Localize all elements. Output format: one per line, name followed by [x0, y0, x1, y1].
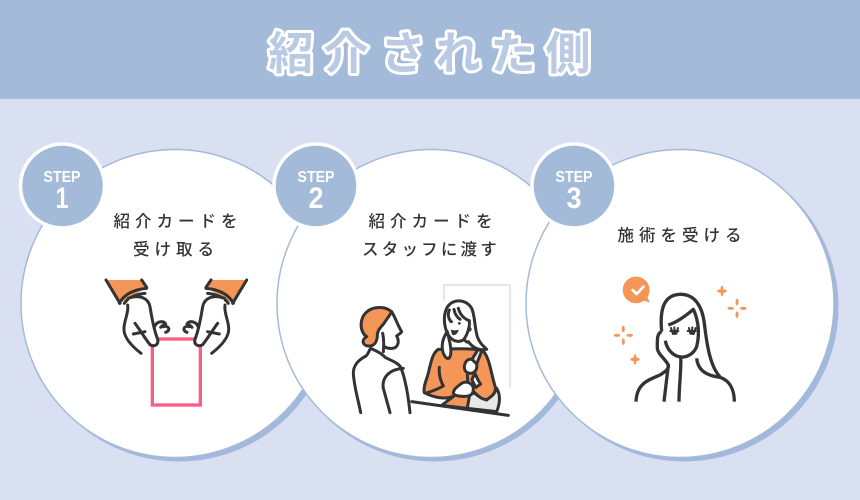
customer — [424, 301, 499, 412]
door frame — [444, 285, 510, 387]
step 1 text: 紹介カードを — [114, 212, 242, 231]
badge: step 2: STEP — [298, 169, 335, 186]
title: さ — [380, 28, 426, 79]
badge: step 3: 3 — [566, 182, 582, 215]
title: 紹 — [268, 28, 314, 79]
step 2 text — [362, 212, 500, 259]
header band — [0, 0, 860, 99]
badge: step 2: 2 — [308, 182, 324, 215]
speech bubble check — [623, 277, 650, 303]
step 1 text — [114, 212, 242, 259]
sparkles — [614, 286, 747, 364]
icon: handing the card to staff — [353, 285, 510, 415]
panel: step 2 — [277, 150, 589, 462]
step 2 text: 紹介カードを — [368, 212, 498, 231]
badge: step 1: 1 — [56, 182, 68, 215]
woman line art — [636, 294, 734, 402]
counter — [412, 402, 508, 415]
title: れ — [435, 28, 481, 79]
panel: step 3 — [526, 150, 838, 462]
title: 側 — [545, 28, 591, 79]
eyelashes — [670, 327, 696, 334]
badge: step 2 — [274, 144, 358, 228]
badge: step 3 — [532, 144, 616, 228]
badge: step 1 — [20, 144, 104, 228]
step 2 text: スタッフに渡す — [362, 240, 500, 259]
staff member — [353, 308, 410, 413]
badge: step 1: STEP — [44, 169, 81, 186]
step 1 text: 受け取る — [133, 240, 219, 259]
panel: step 1 — [21, 150, 334, 462]
title — [268, 28, 591, 79]
badge: step 3: STEP — [556, 169, 593, 186]
title: た — [490, 28, 536, 79]
step 3 text: 施術を受ける — [618, 226, 746, 245]
icon: relaxed woman with sparkles — [614, 277, 747, 402]
icon: hands holding card — [106, 280, 247, 405]
title: 介 — [323, 28, 369, 79]
